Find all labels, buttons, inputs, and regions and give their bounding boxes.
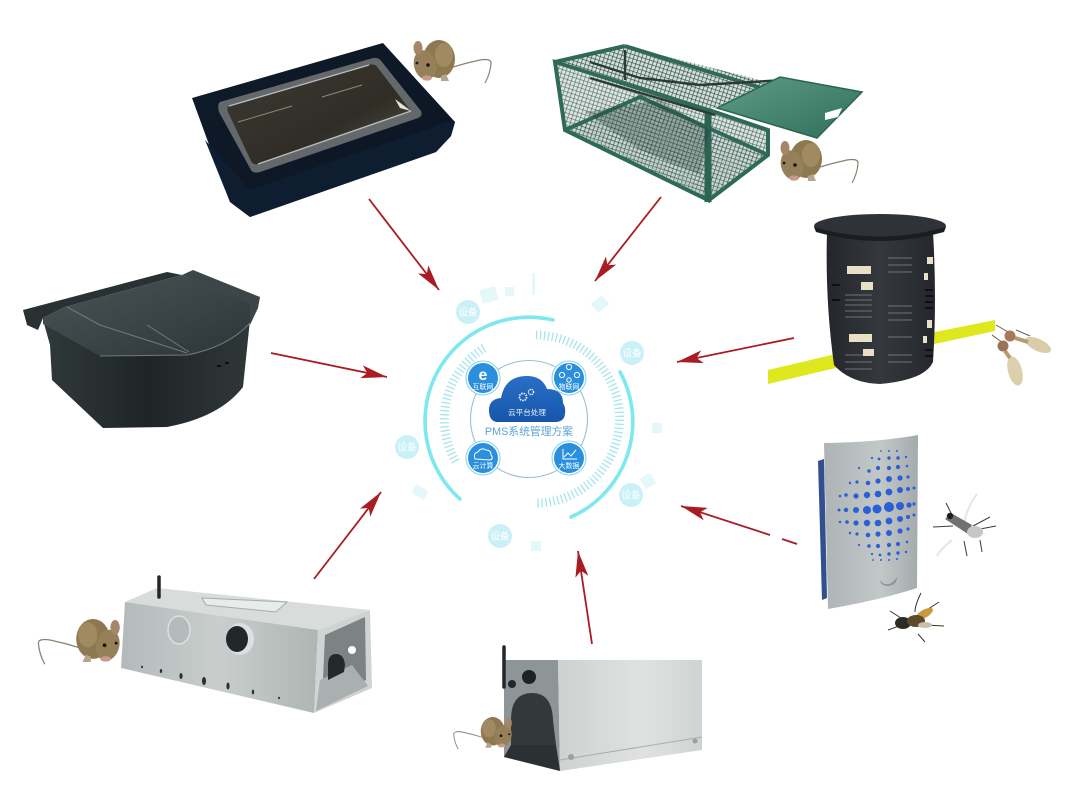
icon: internet: e: [479, 367, 488, 384]
arrow tail segment: fly lamp: [782, 539, 797, 544]
hub: PMS cloud platform diagram: [395, 273, 662, 551]
arrow: top left box to hub: [369, 199, 439, 290]
device node: bottom right: 设备: [621, 490, 641, 502]
mouse: top left box: [410, 40, 491, 83]
device node: top right: [620, 341, 644, 365]
clear window: [218, 58, 422, 173]
inner ring: [470, 360, 588, 478]
arrow: grey box to hub: [271, 353, 387, 377]
arrow: cage to hub: [595, 197, 661, 281]
arrow: steel station to hub: [314, 492, 381, 579]
antenna: [157, 577, 161, 597]
device: black bait box with clear window: [192, 43, 455, 217]
device: blue-dot fly lamp panel: [818, 435, 918, 609]
insect: striped fly: [933, 494, 996, 556]
arrow: fly lamp to hub: [681, 506, 770, 535]
mouse: at arch entrance: [454, 717, 514, 749]
yellow stake: [768, 320, 995, 384]
icon: internet: [466, 361, 500, 395]
icon: internet of things: [552, 361, 586, 395]
dot pattern: [838, 450, 916, 561]
device: dark grey curved bait box: [23, 270, 260, 428]
icon: cloud computing: [466, 441, 500, 475]
icon: internet of things: 物联网: [558, 382, 580, 391]
insects: termites: [992, 325, 1053, 387]
device node: left: [395, 435, 419, 459]
device node: bottom: [488, 524, 512, 548]
device node: top left: 设备: [458, 306, 478, 318]
arrow: termite station to hub: [677, 338, 794, 362]
mouse: left of steel station: [38, 619, 123, 664]
cloud: cloud platform processing: 云平台处理: [508, 407, 546, 417]
device: grey rodent bait station with arch entrance: [504, 647, 702, 771]
device node: left: 设备: [397, 442, 417, 454]
icon: big data: [552, 441, 586, 475]
icon: cloud computing: 云计算: [472, 461, 494, 470]
device: termite bait station: [768, 214, 995, 384]
device node: bottom: 设备: [490, 530, 510, 542]
antenna: [504, 647, 516, 688]
device node: bottom right: [619, 483, 643, 507]
arrow: bottom station to hub: [578, 551, 592, 644]
insect: house fly: [888, 593, 944, 642]
device: steel rodent station with antenna: [121, 577, 372, 713]
icon: internet: 互联网: [472, 382, 494, 391]
device node: top right: 设备: [622, 348, 642, 360]
mouse: under cage door: [777, 140, 858, 183]
icon: big data: 大数据: [558, 461, 580, 470]
hub title: PMS系统管理方案: [485, 424, 573, 438]
faint background marks: [411, 273, 662, 551]
cloud: cloud platform processing: [489, 376, 565, 422]
tick rings: [444, 335, 620, 503]
device node: top left: [456, 300, 480, 324]
outer arcs: [425, 317, 633, 517]
device: green wire cage trap: [555, 46, 862, 202]
